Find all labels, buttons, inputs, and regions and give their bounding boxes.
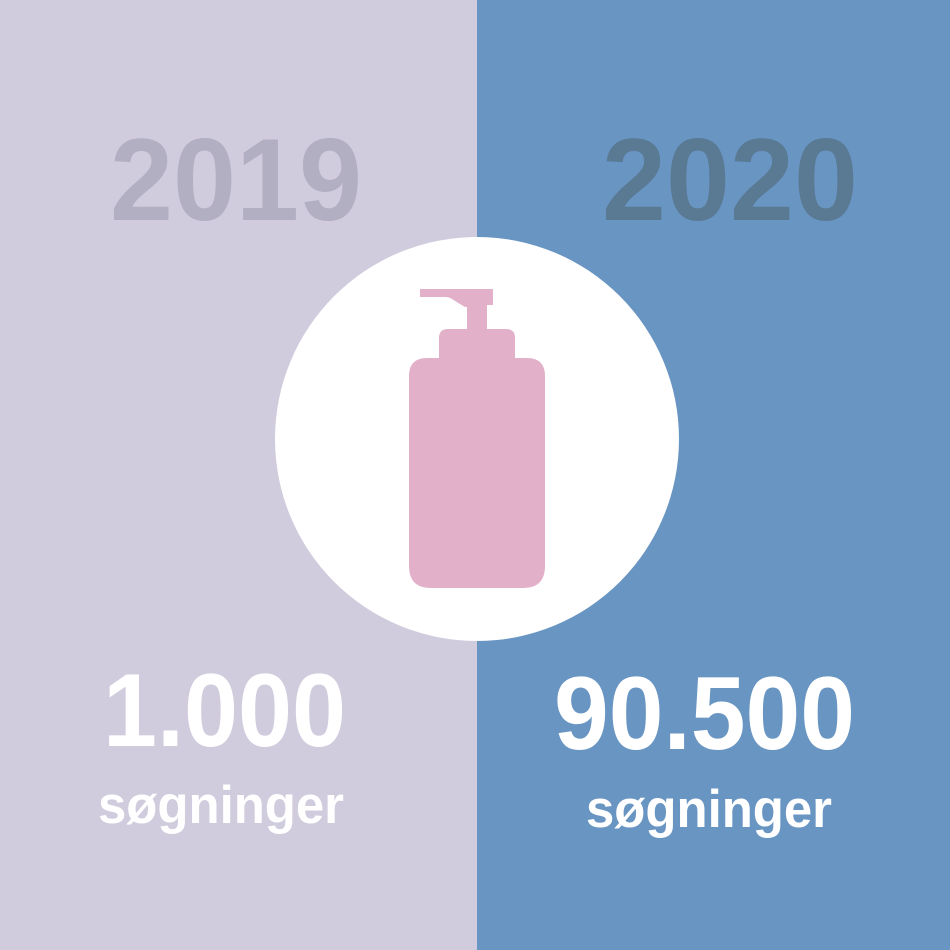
- icon: pump bottle in white circle: [275, 237, 679, 641]
- label: søgninger 2020: søgninger: [586, 780, 832, 839]
- heading: 2019: 2019: [110, 114, 362, 245]
- panel: 2019 background: [0, 0, 477, 950]
- label: søgninger 2019: søgninger: [98, 776, 344, 835]
- stat: 90.500: 90.500: [554, 656, 855, 772]
- stat: 1.000: 1.000: [103, 653, 346, 769]
- heading: 2020: 2020: [602, 114, 858, 245]
- panel: 2020 background: [477, 0, 950, 950]
